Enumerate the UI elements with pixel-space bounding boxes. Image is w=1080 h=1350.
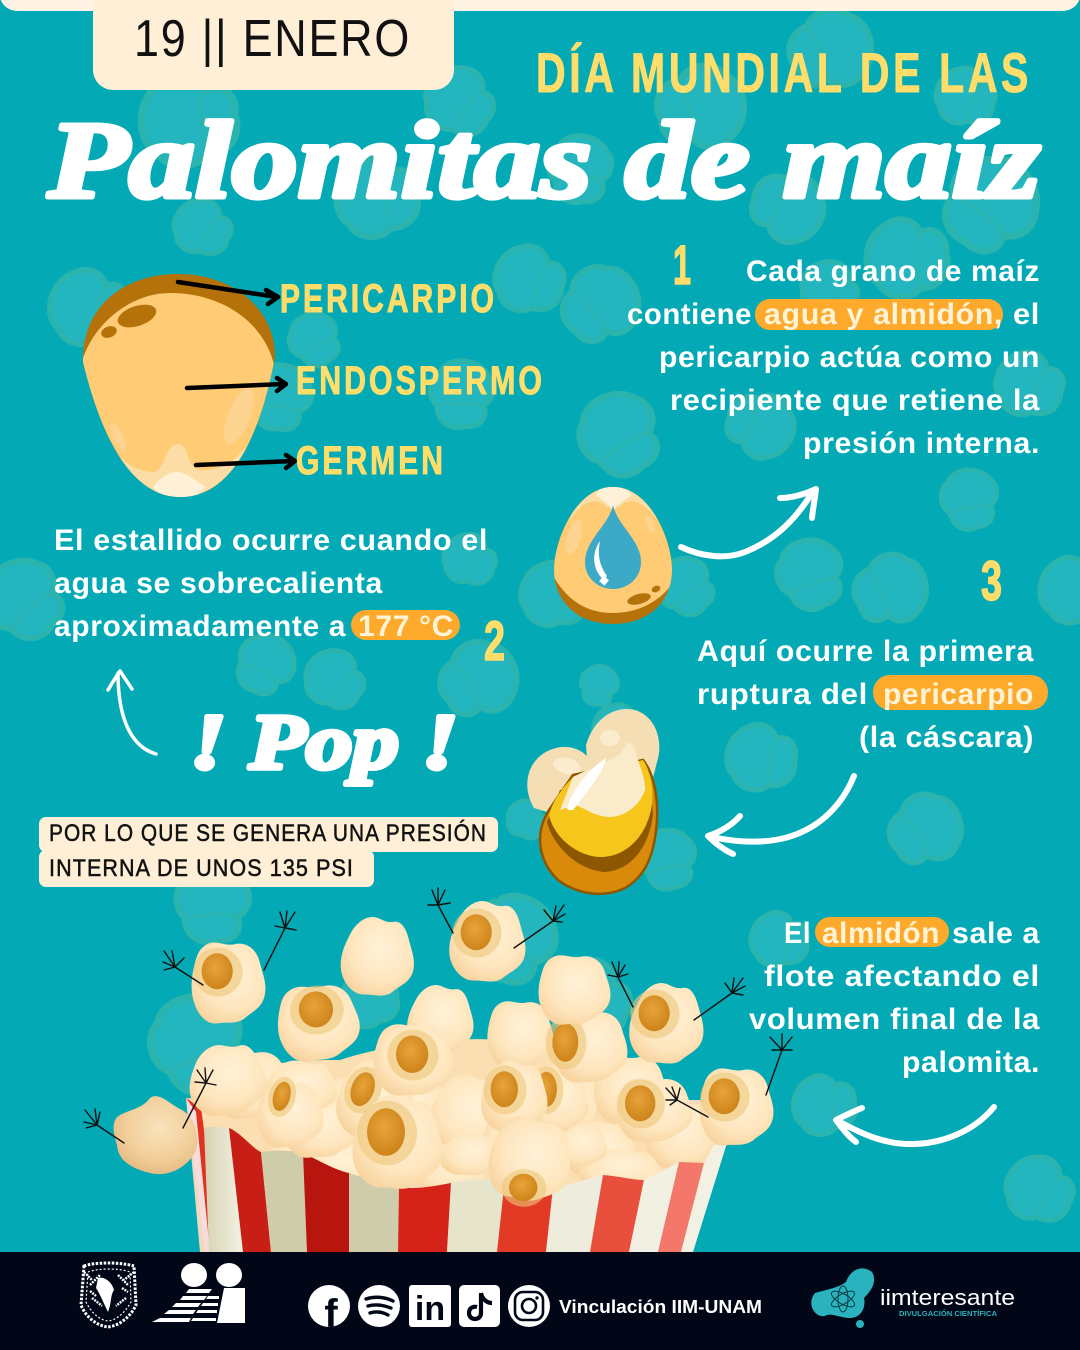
step 2 text <box>54 524 488 643</box>
icon: spotify <box>358 1285 400 1327</box>
date badge <box>93 0 454 90</box>
step 4 text: El <box>784 917 811 950</box>
step 2 text: El estallido ocurre cuando el <box>54 524 488 557</box>
logo: iimteresante: DIVULGACIÓN CIENTÍFICA <box>899 1309 997 1318</box>
pressure callout: INTERNA DE UNOS 135 PSI <box>49 855 354 882</box>
pressure callout: POR LO QUE SE GENERA UNA PRESIÓN <box>49 820 487 847</box>
step 4 text: palomita. <box>902 1046 1040 1079</box>
step 3 text: Aquí ocurre la primera <box>697 635 1034 668</box>
back of the bucket <box>186 1098 728 1252</box>
highlight: agua y almidón: agua y almidón, <box>764 298 1003 331</box>
label: germen: GERMEN <box>296 439 446 483</box>
arrow: kernel to step 1 <box>681 489 816 556</box>
step 3 text: (la cáscara) <box>859 721 1034 754</box>
title: Palomitas de maíz <box>47 99 1040 221</box>
highlight: pericarpio: pericarpio <box>883 678 1034 711</box>
date badge: 19 || ENERO <box>134 10 411 68</box>
step 1 text: presión interna. <box>803 427 1040 460</box>
step 4 text: volumen final de la <box>749 1003 1040 1036</box>
step 1 text: pericarpio actúa como un <box>659 341 1040 374</box>
step 2 text: aproximadamente a <box>54 610 346 643</box>
step 1 number: 1 <box>673 233 691 296</box>
logo: iimteresante <box>811 1268 1015 1328</box>
burst marks <box>84 888 792 1143</box>
popcorn bucket illustration <box>84 888 792 1252</box>
step 1 text: contiene <box>627 298 752 331</box>
arrow: pop to step 2 <box>108 671 156 754</box>
label: endospermo: ENDOSPERMO <box>296 359 545 403</box>
icon: linkedin <box>409 1285 451 1328</box>
kernel with eye <box>275 982 363 1064</box>
step 2 number: 2 <box>484 609 505 672</box>
icon: kernel bursting <box>527 709 659 894</box>
diagram: corn kernel parts <box>70 274 295 502</box>
step 1 text <box>627 255 1040 460</box>
logo: IIM <box>152 1263 245 1323</box>
logo: UNAM crest <box>81 1263 136 1327</box>
icon: facebook <box>308 1285 350 1336</box>
step 1 text: el <box>1013 298 1040 331</box>
step 3 text: ruptura del <box>697 678 868 711</box>
arrow: endospermo <box>187 378 286 391</box>
highlight: temperature: 177 °C <box>358 610 454 643</box>
icon: linkedin: in <box>415 1290 445 1328</box>
flying kernels <box>114 901 773 1174</box>
highlight: almidón: almidón <box>822 917 940 950</box>
social handle: Vinculación IIM-UNAM <box>559 1297 762 1317</box>
step 3 number: 3 <box>981 549 1002 612</box>
icon: instagram <box>508 1285 550 1327</box>
pop heading: ! Pop ! <box>190 698 458 785</box>
footer bar <box>0 1252 1080 1350</box>
step 4 text: flote afectando el <box>764 960 1040 993</box>
step 4 text: sale a <box>952 917 1040 950</box>
arrow: to popcorn <box>836 1107 994 1144</box>
step 1 text: Cada grano de maíz <box>746 255 1040 288</box>
kernels inside <box>200 1039 715 1197</box>
kernels over the rim <box>183 982 692 1210</box>
front stripes of the bucket <box>204 1127 243 1252</box>
step 2 text: agua se sobrecalienta <box>54 567 383 600</box>
arrow: pericarpio <box>178 282 278 304</box>
step 4 text <box>749 917 1040 1079</box>
arrow: step 3 to kernel <box>708 776 854 854</box>
arrow: germen <box>196 455 295 468</box>
logo: iimteresante: iimteresante <box>880 1285 1015 1310</box>
pressure callout <box>39 817 498 887</box>
icon: tiktok <box>459 1285 500 1327</box>
label: pericarpio: PERICARPIO <box>280 277 497 321</box>
step 3 text <box>697 635 1048 754</box>
step 1 text: recipiente que retiene la <box>670 384 1040 417</box>
icon: kernel with water drop <box>554 487 672 624</box>
icon: facebook: f <box>324 1292 338 1336</box>
